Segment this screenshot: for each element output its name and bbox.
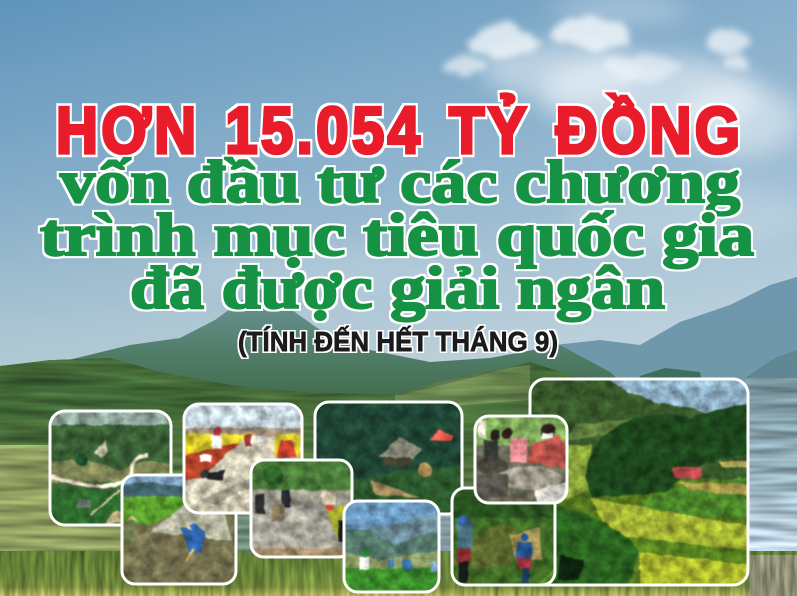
photo: villagers paving concrete path [250, 458, 354, 558]
photo: masked women weaving bamboo baskets [474, 414, 568, 504]
photo: tea pickers on hillside [342, 500, 440, 594]
clouds [150, 0, 797, 295]
mid band [230, 510, 350, 555]
bottom grass strip [0, 551, 797, 596]
photo: women cycling on a village road [182, 402, 304, 514]
date note: (TÍNH ĐẾN HẾT THÁNG 9) [238, 326, 558, 357]
central peak [0, 288, 640, 420]
photo: women carrying harvested rice [450, 486, 556, 586]
foreground terraces [0, 358, 797, 560]
subtitle line 2: trình mục tiêu quốc gia [40, 202, 754, 268]
left terrace stripes [0, 445, 125, 555]
subtitle line 1: vốn đầu tư các chương [60, 149, 740, 215]
photo: stilt house in forest [314, 400, 464, 516]
photo: terraced rice fields and farmers [528, 378, 750, 586]
right side fade [745, 378, 797, 556]
photo: mountain village road from above [48, 410, 172, 526]
subtitle line 3: đã được giải ngân [130, 255, 665, 321]
photo: workers spreading cement by rice field [120, 474, 238, 586]
far right mountain [555, 277, 797, 420]
title: red headline: HƠN 15.054 TỶ ĐỒNG [56, 95, 740, 168]
